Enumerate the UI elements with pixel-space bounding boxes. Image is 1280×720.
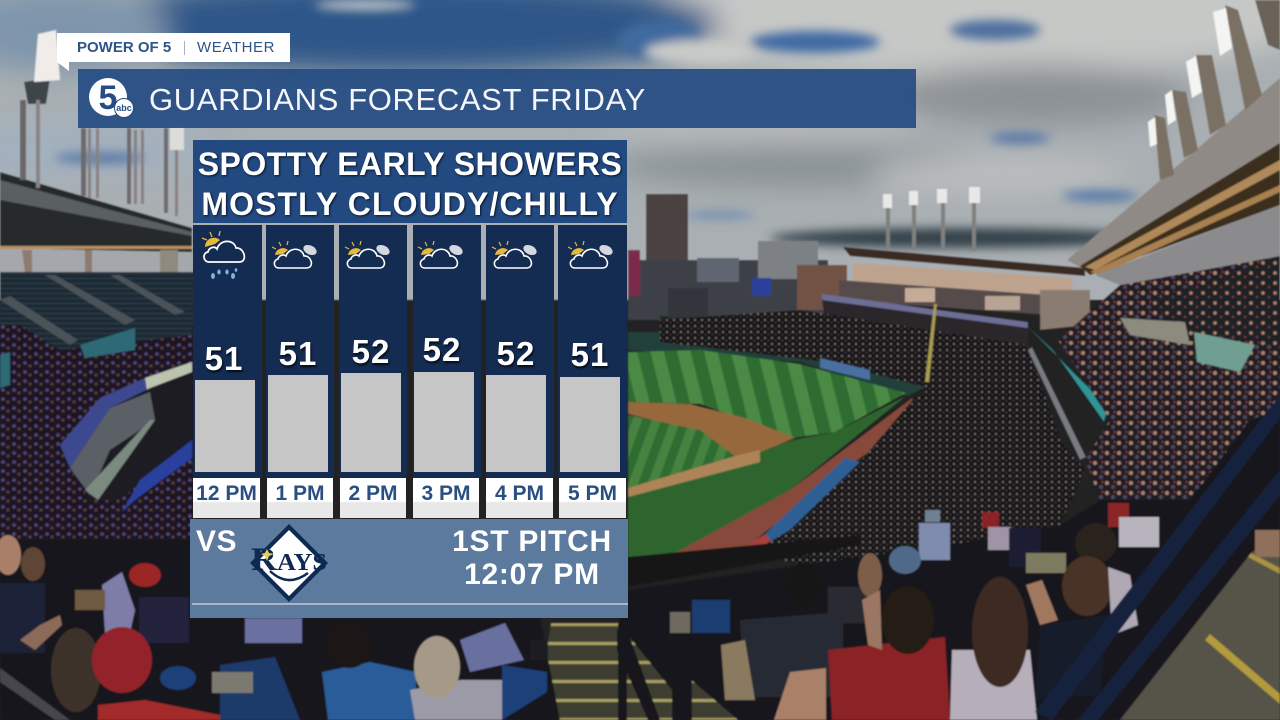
mid fans [919,523,950,560]
column: 4 PM [486,225,554,478]
icon: station logo: 5 [99,79,117,117]
text: VS: VS [196,525,237,558]
left light towers [20,30,184,216]
concrete walkway [1120,530,1280,720]
hour label: 4 PM: 4 PM [495,482,544,505]
upper deck and signs [822,247,1090,350]
green mural and concourse block [1194,332,1255,372]
title text: GUARDIANS FORECAST FRIDAY [149,82,646,117]
tag: Power of 5 Weather [57,33,290,62]
gray haired woman [410,680,502,720]
icon: station logo: abc [116,103,132,113]
railings [1035,395,1280,720]
panel: forecast headline: MOSTLY CLOUDY/CHILLY [201,186,619,222]
bar: 52 [486,375,546,472]
bullpen tarp [765,458,860,542]
yellow paint line [1205,634,1280,704]
left foreground fans [0,535,560,720]
man in red shirt [828,637,950,720]
panel: forecast headline: SPOTTY EARLY SHOWERS [198,146,622,182]
icon: sun and cloud [344,241,390,269]
stairs center [535,600,738,720]
icon: sun and cloud [492,241,537,269]
hour label: 12 PM [193,478,260,518]
stands behind the outfield [628,304,1070,470]
hour label: 3 PM [413,478,479,518]
text: first pitch: 1ST PITCH [452,525,612,558]
column: 5 PM [558,225,627,478]
icon: station logo [89,78,134,118]
bar: 51 [268,375,328,472]
hour label: 2 PM [340,478,406,518]
title bar [78,69,916,128]
hour label: 3 PM: 3 PM [421,482,470,505]
left stands [0,172,195,555]
foul line dirt [628,450,760,497]
lower grass [628,396,906,562]
hour label: 1 PM: 1 PM [275,482,324,505]
column: 2 PM [339,225,407,478]
hour label: 5 PM [559,478,626,518]
tag: Power of 5 Weather: WEATHER [197,39,275,56]
infield dirt [628,402,795,457]
temp: 51: 51 [571,336,609,373]
hour label: 2 PM: 2 PM [348,482,398,505]
man in black shirt [740,612,843,697]
temp: 52: 52 [423,331,461,368]
tag: Power of 5 Weather: POWER OF 5 [77,39,171,56]
divider strip [192,603,628,605]
temp: 51: 51 [205,340,243,377]
temp: 52: 52 [497,335,535,372]
text: first pitch: 12:07 PM [464,558,600,591]
skyline [628,194,847,342]
distant light towers [883,187,980,251]
icon: sun and cloud [568,241,613,269]
crowd in the middle stand [752,372,1085,565]
teal ribbon board [1028,327,1108,422]
icon: sun and cloud [272,241,317,269]
infield grass [628,415,735,488]
temp: 52: 52 [352,333,390,370]
woman in navy [1035,615,1108,700]
bar: 51 [560,377,620,472]
hour label: 12 PM: 12 PM [196,482,257,505]
blue shirt man [322,662,416,720]
icon: Rays logo: RAYS [251,542,327,578]
woman in white [950,650,1037,720]
ballpark sky gap and roof [0,248,195,272]
column: 1 PM [266,225,334,478]
icon: sun and cloud [418,241,463,269]
hour label: 5 PM: 5 PM [568,482,617,505]
hour label: 4 PM [486,478,553,518]
icon: sun behind rain cloud [202,231,246,279]
sky [0,0,1280,300]
ribbon board and concourse [60,362,192,468]
outfield [628,350,906,438]
text: first pitch [452,525,612,591]
bar: 52 [341,373,401,472]
right roof [1067,78,1280,285]
right light towers [1148,0,1280,180]
foreground right crowd base [540,410,1280,720]
rail across the tarp [628,535,860,587]
right upper stands [1058,256,1280,500]
bar: 51 [195,380,255,472]
hour label: 1 PM [267,478,333,518]
tag pointer [57,62,69,71]
bar: 52 [414,372,474,472]
column: 3 PM [413,225,481,478]
column: 12 PM [193,225,262,478]
warning track [666,398,925,558]
icon: Rays logo [250,524,328,602]
temp: 51: 51 [279,335,317,372]
panel: forecast headline [193,140,627,223]
panel: matchup and first pitch [190,519,628,618]
